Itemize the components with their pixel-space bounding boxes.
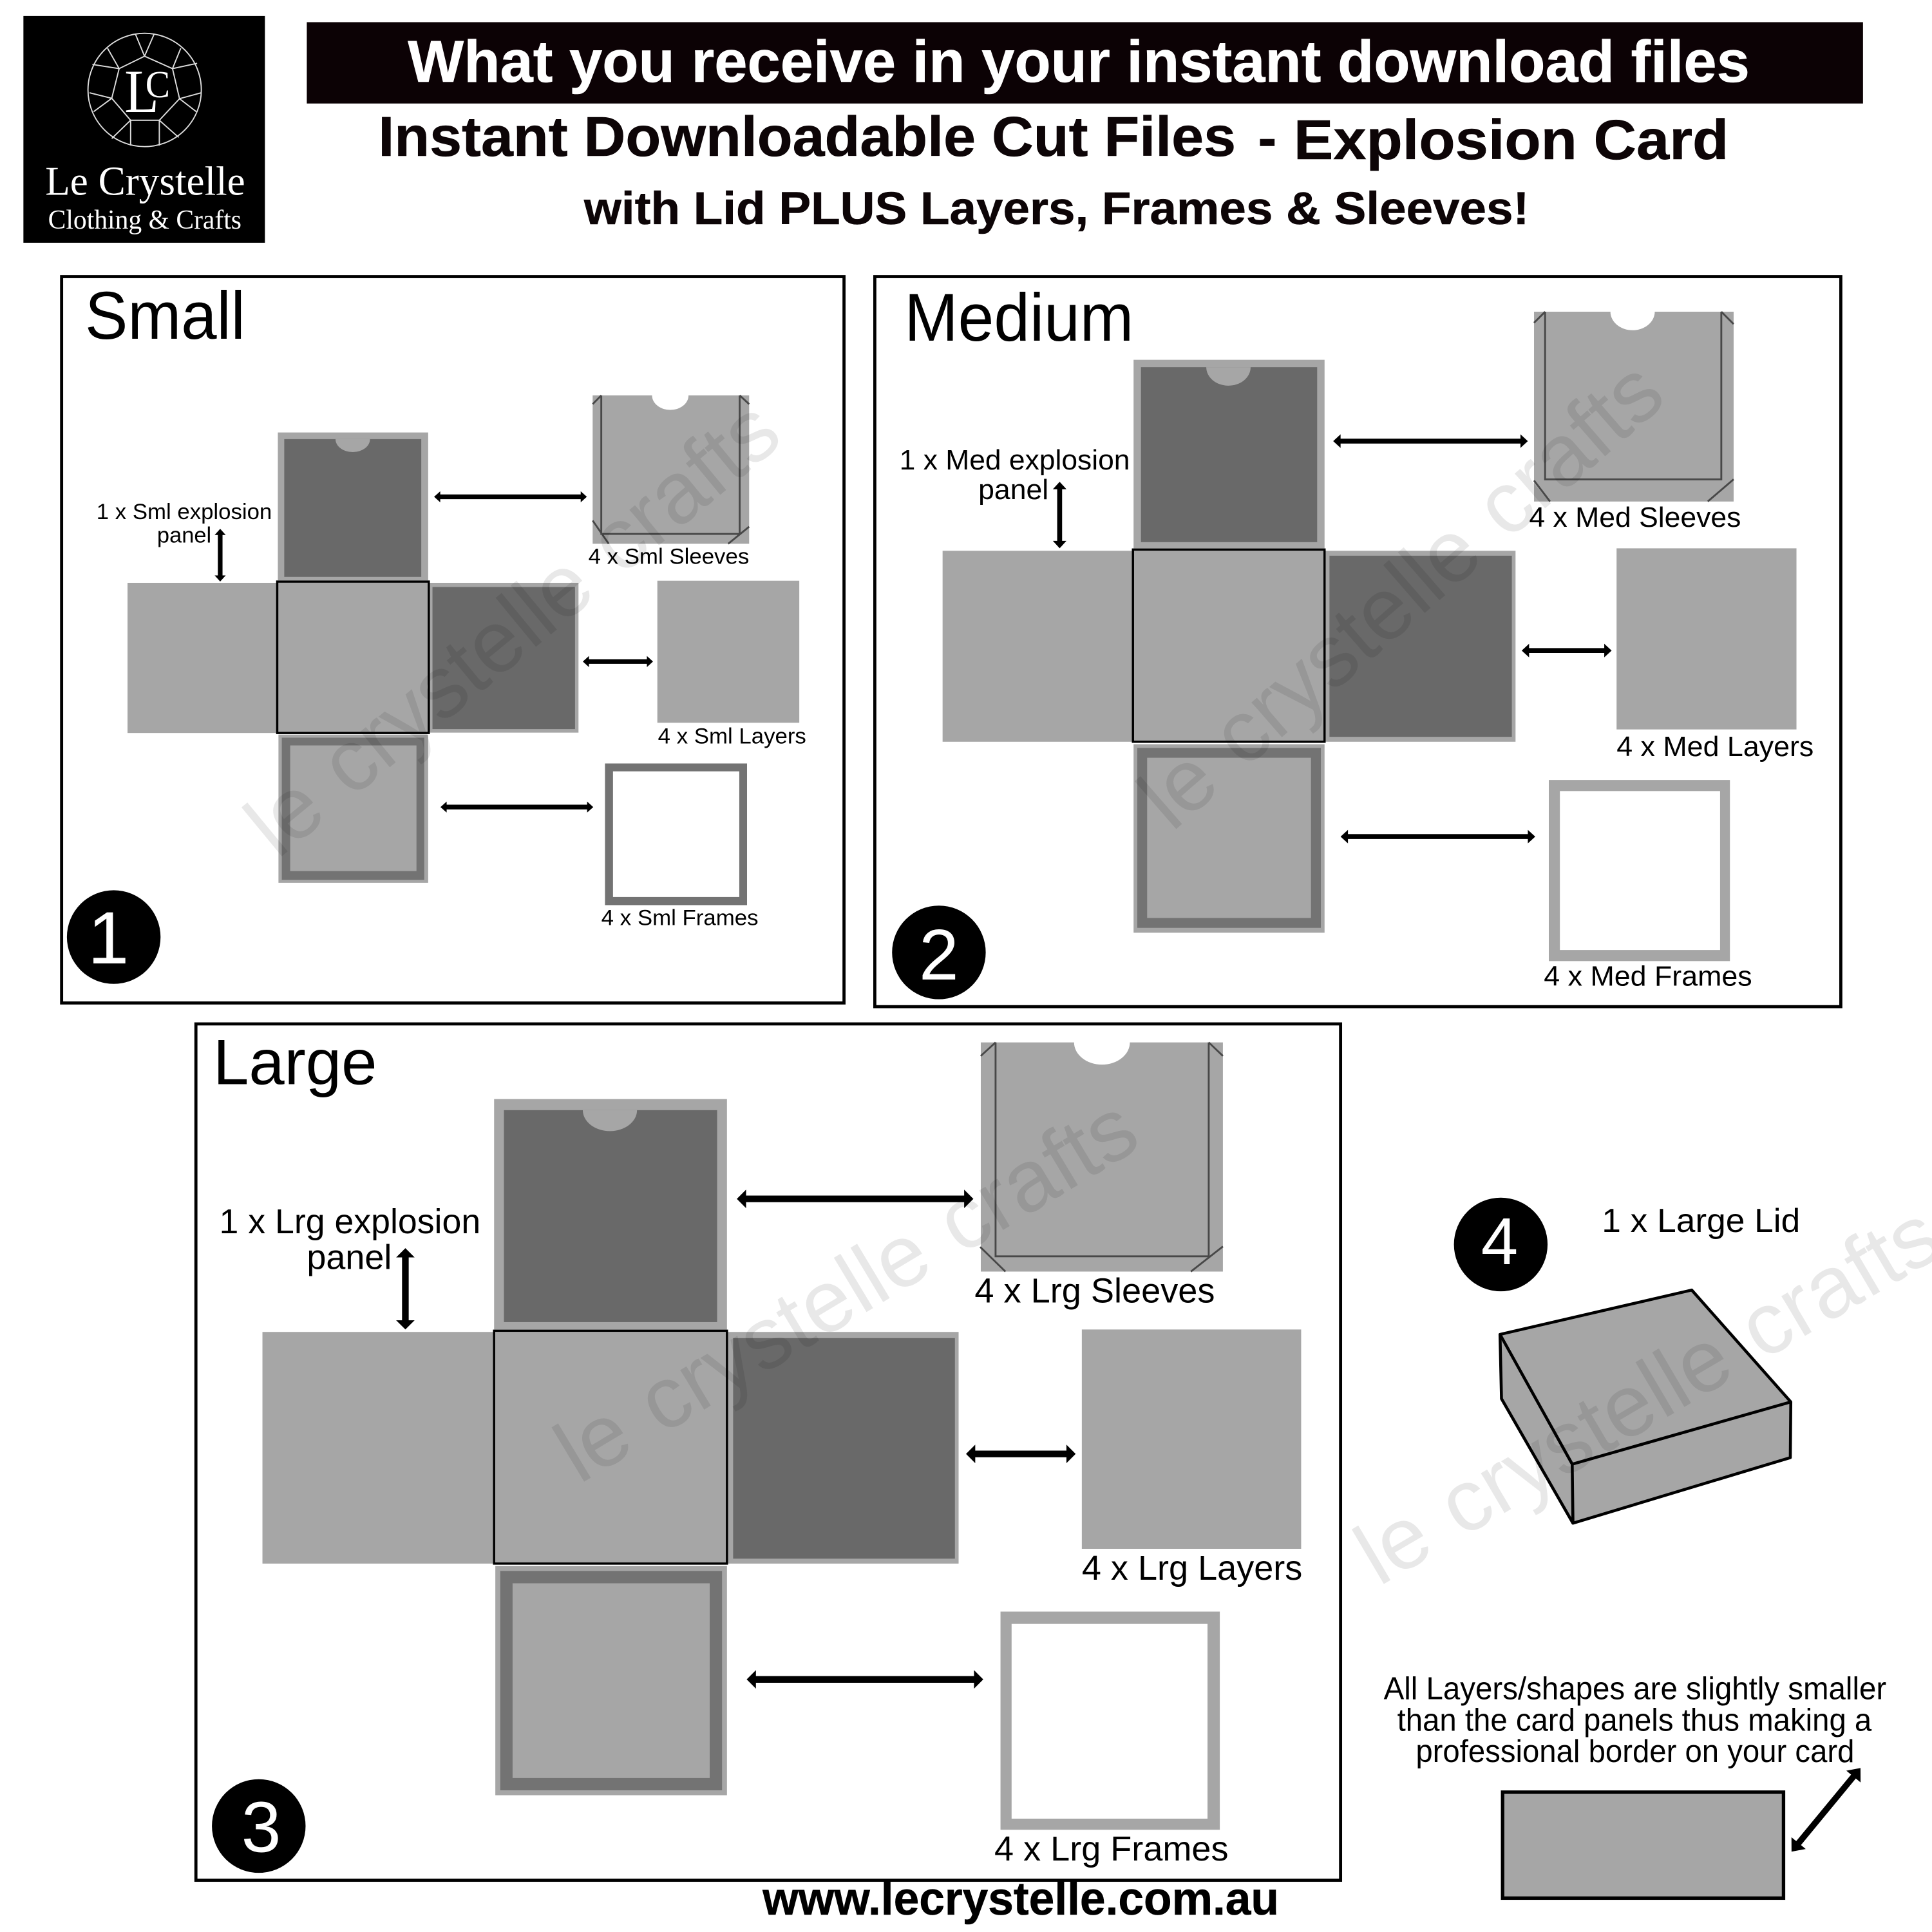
large explosion label: 1 x Lrg explosion [220,1203,480,1241]
large heading: Large [213,1027,377,1099]
note arrow [1785,1762,1868,1857]
logo wordmark: Le Crystelle [45,158,245,204]
lid label: 1 x Large Lid [1602,1202,1800,1239]
number badge 2 [892,905,986,999]
logo tagline: Clothing & Crafts [48,205,242,235]
arrow [434,491,587,502]
arrow [1522,644,1612,658]
note text [1384,1671,1886,1769]
arrow [966,1444,1075,1463]
heading line 1: Instant Downloadable Cut Files [378,106,1236,168]
large explosion panel net [263,1099,959,1795]
large sleeves label: 4 x Lrg Sleeves [974,1272,1215,1310]
logo monogram: L [124,57,159,126]
medium frame [1549,780,1730,961]
small explosion label [97,500,272,547]
logo emblem: faceted crystal [88,33,202,147]
number badge 4: 4 [1481,1204,1518,1278]
medium explosion label: 1 x Med explosion [900,444,1130,476]
small frames label: 4 x Sml Frames [601,905,759,930]
watermark: large: le crystelle crafts [538,1077,1153,1501]
heading line 2: with Lid PLUS Layers, Frames & Sleeves! [583,183,1529,234]
large frame [1001,1612,1220,1830]
medium panel frame [875,277,1841,1007]
panel: large [196,1024,1341,1880]
heading line 1: Explosion Card [1294,109,1728,171]
note text: All Layers/shapes are slightly smaller [1384,1671,1886,1706]
arrow [746,1670,983,1689]
number badge 2: 2 [919,915,959,995]
arrow [737,1189,973,1208]
number badge 1: 1 [88,897,129,980]
medium heading: Medium [904,280,1133,355]
medium sleeves label: 4 x Med Sleeves [1529,502,1741,533]
small panel frame [62,277,844,1003]
watermark: medium: le crystelle crafts [1120,341,1681,847]
medium explosion panel net [943,360,1515,933]
arrow [583,656,653,667]
number badge 4 [1454,1198,1548,1291]
website url: www.lecrystelle.com.au [762,1873,1279,1925]
title text: What you receive in your instant download files [408,29,1750,95]
small sleeves label: 4 x Sml Sleeves [589,545,749,569]
number badge 3: 3 [242,1788,281,1868]
small explosion panel net [128,433,578,883]
medium sleeve [1534,312,1734,502]
medium explosion label: panel [978,474,1048,506]
large frames label: 4 x Lrg Frames [994,1830,1229,1868]
number badge 1 [67,890,160,984]
large sleeve [980,1043,1223,1271]
small explosion label: 1 x Sml explosion [97,500,272,524]
large layer [1082,1329,1301,1549]
icon: lid box [1500,1290,1791,1523]
watermark: small: le crystelle crafts [227,380,797,875]
small heading: Small [85,278,245,354]
border note [1384,1671,1886,1898]
note sample card [1502,1792,1783,1898]
heading line 1 [378,106,1728,171]
large panel frame [196,1024,1341,1880]
small layers label: 4 x Sml Layers [658,724,806,748]
note text: than the card panels thus making a [1397,1703,1872,1738]
panel: small [62,277,844,1003]
panel: medium [875,277,1841,1007]
note text: professional border on your card [1416,1734,1854,1769]
arrow [214,529,226,582]
small layer [658,581,799,723]
arrow [440,802,593,813]
small explosion label: panel [157,523,211,547]
title banner [307,22,1863,104]
logo monogram: C [146,63,170,106]
large layers label: 4 x Lrg Layers [1082,1549,1302,1587]
small sleeve [592,395,749,544]
large explosion label: panel [307,1239,392,1277]
arrow [396,1248,415,1329]
large explosion label [220,1203,480,1277]
medium layer [1616,548,1797,730]
logo [23,16,265,243]
arrow [1341,830,1535,844]
panel: lid [1454,1198,1800,1523]
medium explosion label [900,444,1130,506]
arrow [1333,434,1528,448]
arrow [1053,482,1066,548]
small frame [605,763,747,905]
medium layers label: 4 x Med Layers [1616,731,1814,762]
heading line 1: - [1258,107,1276,169]
medium frames label: 4 x Med Frames [1544,961,1752,992]
number badge 3 [212,1779,305,1873]
